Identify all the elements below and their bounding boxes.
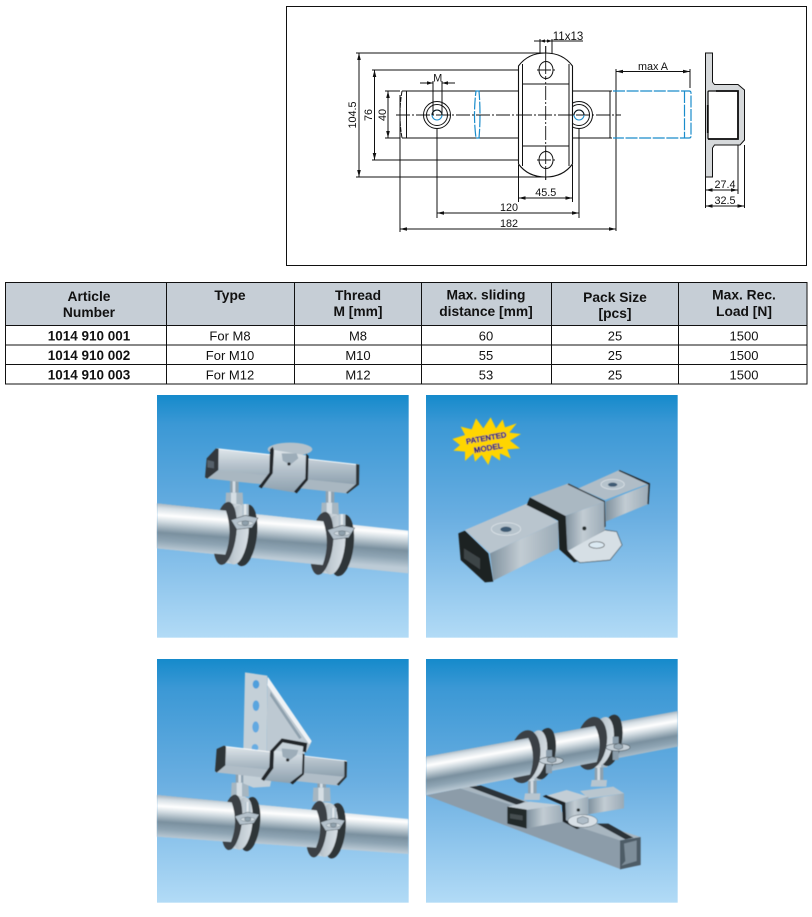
dimension extension lines [356,39,744,232]
table header: Pack Size [583,290,647,305]
dimension labels: 76 [363,109,375,121]
table header [63,288,776,321]
table row M12: For M12 [206,368,254,382]
dimension labels: 120 [500,202,518,214]
dimension labels: 45.5 [535,187,556,199]
table row M12: 25 [608,368,622,382]
centre lines [396,46,621,181]
dimension labels: max A [638,61,669,73]
table: article specifications [6,282,807,384]
photo: bracket standing on channel rail [425,659,678,903]
photo: bracket mounted on wall angle [156,659,409,903]
pipe [426,711,678,795]
table header: Article [68,289,111,304]
dimension labels: 40 [377,109,389,121]
badge: patented model [452,417,521,465]
slide bar [215,738,347,788]
table header: distance [mm] [439,304,533,319]
table row M12: 1014 910 003 [48,368,131,382]
table row M8: 1014 910 001 [48,328,131,344]
table row M8 [48,328,758,344]
profile: side view [706,53,744,177]
pipe [157,503,408,573]
badge: patented model: MODEL [473,441,503,455]
threaded hole: right [566,102,592,128]
table row M10: 25 [608,348,622,363]
dimension labels: 11x13 [553,31,583,43]
table header: Max. sliding [447,288,525,302]
table row M8: 1500 [730,328,758,344]
table row M12: M12 [345,368,371,382]
table header: M [mm] [333,304,383,319]
channel rail [426,785,641,869]
table row M10 [48,348,758,363]
table header: Type [214,288,246,303]
dimension labels: M [433,72,442,84]
table header: Thread [335,288,381,303]
threaded hole: left [424,102,450,128]
table row M10: 1500 [730,348,758,363]
table header: Load [N] [716,304,772,319]
table header: [pcs] [599,306,631,321]
table header: Max. Rec. [712,288,776,302]
dimension labels: 32.5 [714,195,736,207]
table row M10: M10 [345,348,371,363]
table row M8: 60 [479,328,493,344]
pipe [157,795,408,854]
dimension labels: 182 [500,218,518,230]
table row M10: 1014 910 002 [48,348,130,363]
table row M12: 1500 [730,368,758,382]
panel: technical drawing [286,6,806,266]
table row M10: 55 [479,348,493,363]
slide bar [507,787,624,829]
badge: patented model: PATENTED [465,430,508,446]
table row M8: 25 [608,328,622,344]
table row M8: For M8 [209,328,251,344]
photo: bracket product with patent badge [426,395,678,638]
dimension labels: 27.4 [714,179,736,191]
table row M10: For M10 [206,348,254,363]
wall angle bracket [243,672,312,752]
table row M8: M8 [349,328,367,344]
slide bar [205,443,359,494]
table header: Number [63,305,116,320]
table row M12: 53 [479,368,493,382]
dimension lines with arrows [357,39,744,231]
photo: bracket holding pipe from above [156,395,409,638]
dimension labels [347,31,736,230]
profile: front view of slide bar [400,91,691,138]
slide bar product [458,470,650,582]
table row M12 [48,368,758,382]
dimension labels: 104.5 [347,101,359,129]
slotted plate [518,46,573,181]
